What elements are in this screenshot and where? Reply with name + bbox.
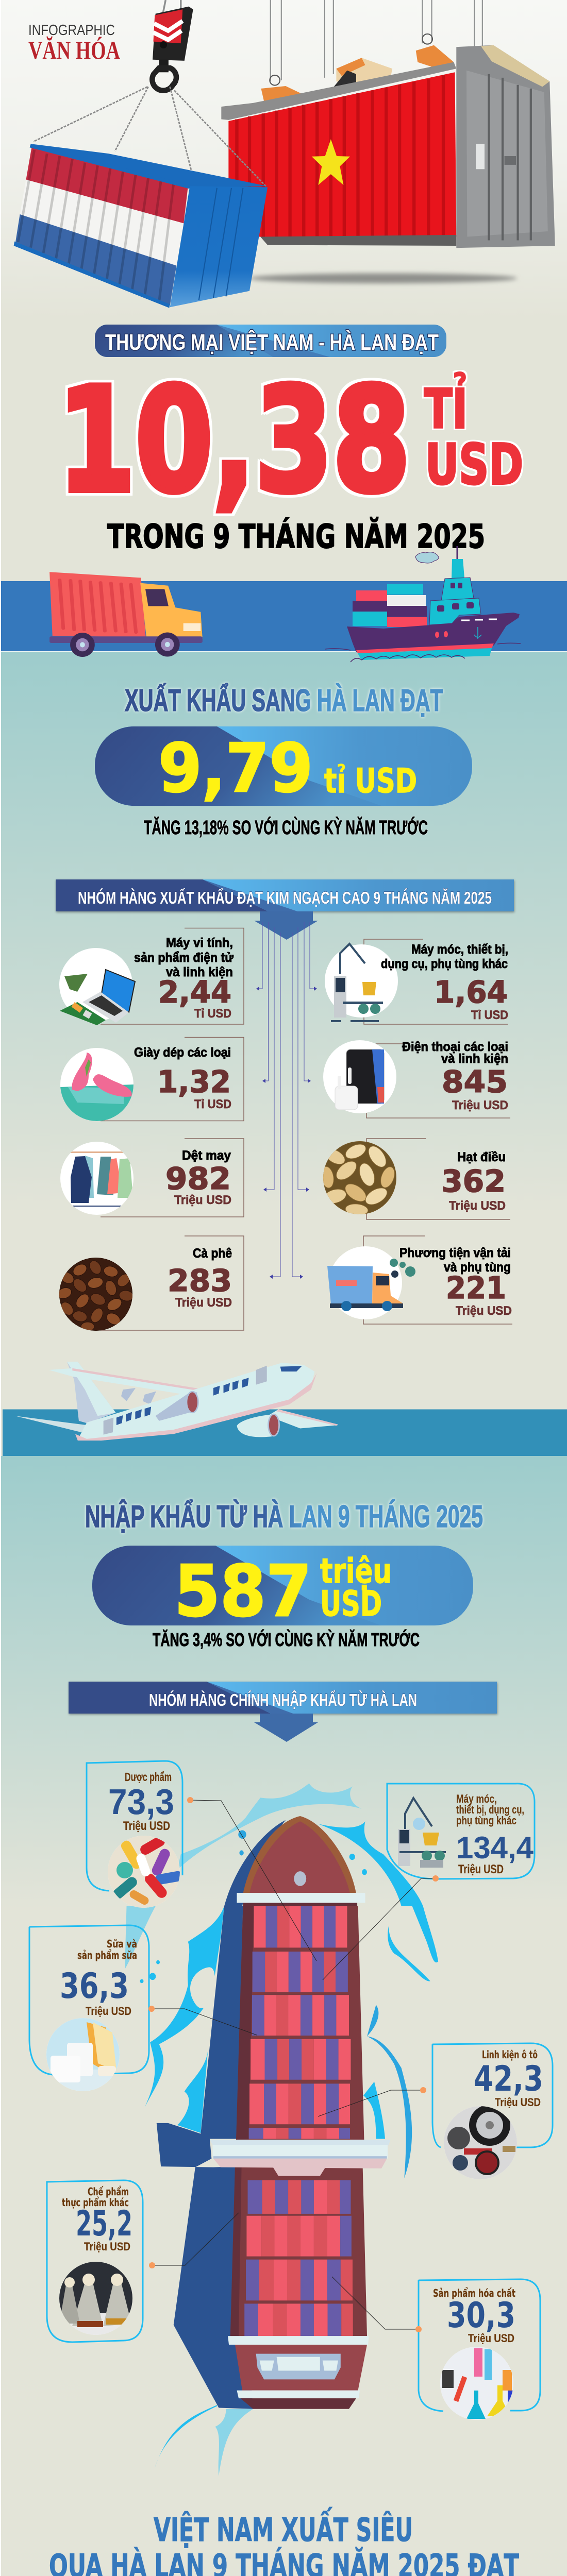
left edge strip [0, 0, 1, 2576]
pill: export value 9,79 ti USD: tỉ USD [324, 762, 417, 801]
photo: pills [108, 1834, 184, 1908]
card: vehicles: 221 [446, 1270, 506, 1306]
card: vehicles: Phương tiện vận tải [399, 1246, 511, 1260]
callout: pharmaceuticals: 73,3 [108, 1782, 174, 1822]
container ship seen from above [157, 1816, 391, 2409]
pill: import value 587 trieu USD: 587 [174, 1551, 312, 1633]
ship hull and containers [157, 1906, 391, 2409]
title pill: Thuong mai Viet Nam - Ha Lan dat [95, 325, 446, 357]
card: phones: 845 [442, 1064, 508, 1099]
logo: Infographic Van Hoa: INFOGRAPHIC [28, 22, 115, 39]
shadow under containers [249, 273, 517, 283]
leader line [152, 2213, 239, 2265]
callout: auto parts [318, 2043, 553, 2179]
text: import growth: TĂNG 3,4% SO VỚI CÙNG KỲ NĂM TRƯỚC [153, 1629, 420, 1650]
card: cashews: Triệu USD [449, 1199, 506, 1213]
connector arrows from banner to export groups [256, 922, 317, 1279]
callout: machinery [323, 1784, 535, 1980]
card: phones: và linh kiện [441, 1052, 508, 1066]
photo: chemical flasks [440, 2347, 514, 2420]
big number: 10,38 ti USD: USD [425, 433, 523, 497]
card: textiles [60, 1139, 244, 1217]
logo: Infographic Van Hoa [28, 22, 120, 64]
icon: cargo ship [325, 546, 521, 662]
heading: Viet Nam xuat sieu: VIỆT NAM XUẤT SIÊU [154, 2507, 413, 2549]
icon: delivery truck [327, 1259, 415, 1311]
card: footwear [60, 1038, 244, 1123]
banner: import commodity groups [69, 1682, 497, 1742]
callout: food preparations: thực phẩm khác [62, 2196, 129, 2209]
leader line [190, 1800, 316, 1961]
icon: phone and earbuds [335, 1049, 384, 1110]
callout: chemicals [332, 2277, 540, 2420]
callout: food preparations: 25,2 [76, 2204, 132, 2244]
photo: auto parts [444, 2105, 517, 2179]
callout: dairy: 36,3 [60, 1966, 129, 2007]
text: export growth: TĂNG 13,18% SO VỚI CÙNG KỲ NĂM TRƯỚC [144, 816, 428, 839]
icon: coffee beans [56, 1258, 135, 1331]
icon: clothes rack [70, 1151, 132, 1207]
card: computers and electronics: sản phẩm điện tử [134, 951, 234, 965]
card: textiles: 982 [165, 1161, 231, 1196]
icon: laptop and circuit board [60, 970, 135, 1025]
card: textiles: Triệu USD [174, 1193, 231, 1207]
big number: 10,38 ti USD: 10,38 [58, 357, 410, 524]
blue band [1, 581, 567, 652]
red Vietnam container [221, 0, 555, 248]
card: machinery [325, 939, 508, 1024]
card: vehicles: và phụ tùng [444, 1260, 511, 1275]
callout: chemicals: Triệu USD [468, 2332, 514, 2345]
callout: food preparations: Triệu USD [84, 2240, 130, 2253]
banner: export commodity groups [56, 879, 514, 940]
card: machinery: dụng cụ, phụ tùng khác [381, 957, 508, 971]
callout: chemicals: Sản phẩm hóa chất [433, 2287, 515, 2299]
heading: Viet Nam xuat sieu [49, 2507, 519, 2576]
pill: import value 587 trieu USD [92, 1546, 473, 1633]
callout: pharmaceuticals [87, 1761, 316, 1961]
callout: machinery: Triệu USD [458, 1862, 504, 1876]
card: cashews: Hạt điều [457, 1150, 506, 1164]
pill: export value 9,79 ti USD [95, 726, 472, 807]
card: machinery: Tỉ USD [471, 1008, 508, 1022]
ship bow [224, 1816, 365, 1906]
pill: import value 587 trieu USD: USD [320, 1584, 382, 1624]
big number: 10,38 ti USD: TỈ [424, 372, 468, 440]
card: computers and electronics: Tỉ USD [194, 1007, 231, 1021]
card: footwear: Giày dép các loại [134, 1045, 231, 1060]
icon: airplane [15, 1362, 338, 1440]
callout: auto parts: Linh kiện ô tô [482, 2048, 538, 2061]
callout: food preparations: Chế phẩm [88, 2185, 129, 2198]
card: computers and electronics: Máy vi tính, [166, 936, 233, 950]
pill: export value 9,79 ti USD: 9,79 [158, 729, 313, 807]
leader line [318, 2090, 423, 2116]
card: textiles: Dệt may [182, 1148, 231, 1163]
card: cashews: 362 [441, 1163, 506, 1199]
card: phones [323, 1040, 510, 1118]
card: coffee: Cà phê [193, 1246, 232, 1261]
callout: auto parts: Triệu USD [495, 2096, 541, 2109]
icon: factory machine [331, 944, 383, 1022]
card: coffee: Triệu USD [175, 1296, 232, 1310]
callout: pharmaceuticals: Dược phẩm [125, 1770, 172, 1784]
card: vehicles: Triệu USD [456, 1304, 512, 1318]
callout: food preparations [47, 2180, 239, 2342]
card: computers and electronics [59, 928, 244, 1025]
leader line [332, 2277, 419, 2329]
photo: milk and cheese [46, 2018, 120, 2091]
callout: machinery: Máy móc, [456, 1792, 497, 1805]
callout: machinery: phụ tùng khác [456, 1814, 516, 1827]
card: footwear: 1,32 [157, 1064, 231, 1099]
card: footwear: Tỉ USD [194, 1097, 231, 1111]
water splash around ship [125, 1783, 438, 2476]
card: computers and electronics: 2,44 [158, 974, 231, 1010]
card: coffee: 283 [168, 1263, 232, 1298]
card: machinery: Máy móc, thiết bị, [411, 942, 508, 957]
card: machinery: 1,64 [434, 974, 508, 1010]
card: cashews [320, 1139, 510, 1219]
callout: pharmaceuticals: Triệu USD [123, 1819, 170, 1833]
card: phones: Triệu USD [452, 1098, 508, 1112]
leader line [323, 1878, 436, 1980]
callout: dairy: Triệu USD [86, 2005, 131, 2018]
crane hook [34, 0, 266, 186]
title pill: Thuong mai Viet Nam - Ha Lan dat: THƯƠNG MẠI VIỆT NAM - HÀ LAN ĐẠT [105, 329, 439, 355]
card: vehicles [327, 1236, 512, 1324]
callout: chemicals: 30,3 [447, 2295, 515, 2336]
blue runway band [3, 1410, 567, 1456]
card: phones: Điện thoại các loại [402, 1040, 508, 1054]
icon: shoes [60, 1053, 134, 1123]
hero: containers and crane [14, 0, 555, 308]
callout: dairy: Sữa và [107, 1938, 137, 1950]
icon: machine arm [398, 1798, 446, 1868]
icon: truck [49, 572, 203, 657]
card: coffee [56, 1236, 244, 1331]
callout: machinery: thiết bị, dụng cụ, [456, 1803, 524, 1816]
logo: Infographic Van Hoa: VĂN HÓA [28, 36, 120, 64]
callout: dairy: sản phẩm sữa [77, 1949, 137, 1961]
callout: dairy [29, 1925, 257, 2091]
pill: import value 587 trieu USD: triệu [320, 1551, 392, 1591]
photo: lab flasks [59, 2262, 132, 2336]
Netherlands container [14, 144, 268, 308]
leader line [152, 2009, 257, 2035]
callout: auto parts: 42,3 [474, 2059, 543, 2099]
callout: machinery: 134,4 [456, 1831, 534, 1865]
banner: import commodity groups: NHÓM HÀNG CHÍNH NHẬP KHẨU TỪ HÀ LAN [149, 1690, 417, 1709]
icon: cashew nuts [320, 1141, 397, 1216]
card: computers and electronics: và linh kiện [166, 965, 233, 979]
